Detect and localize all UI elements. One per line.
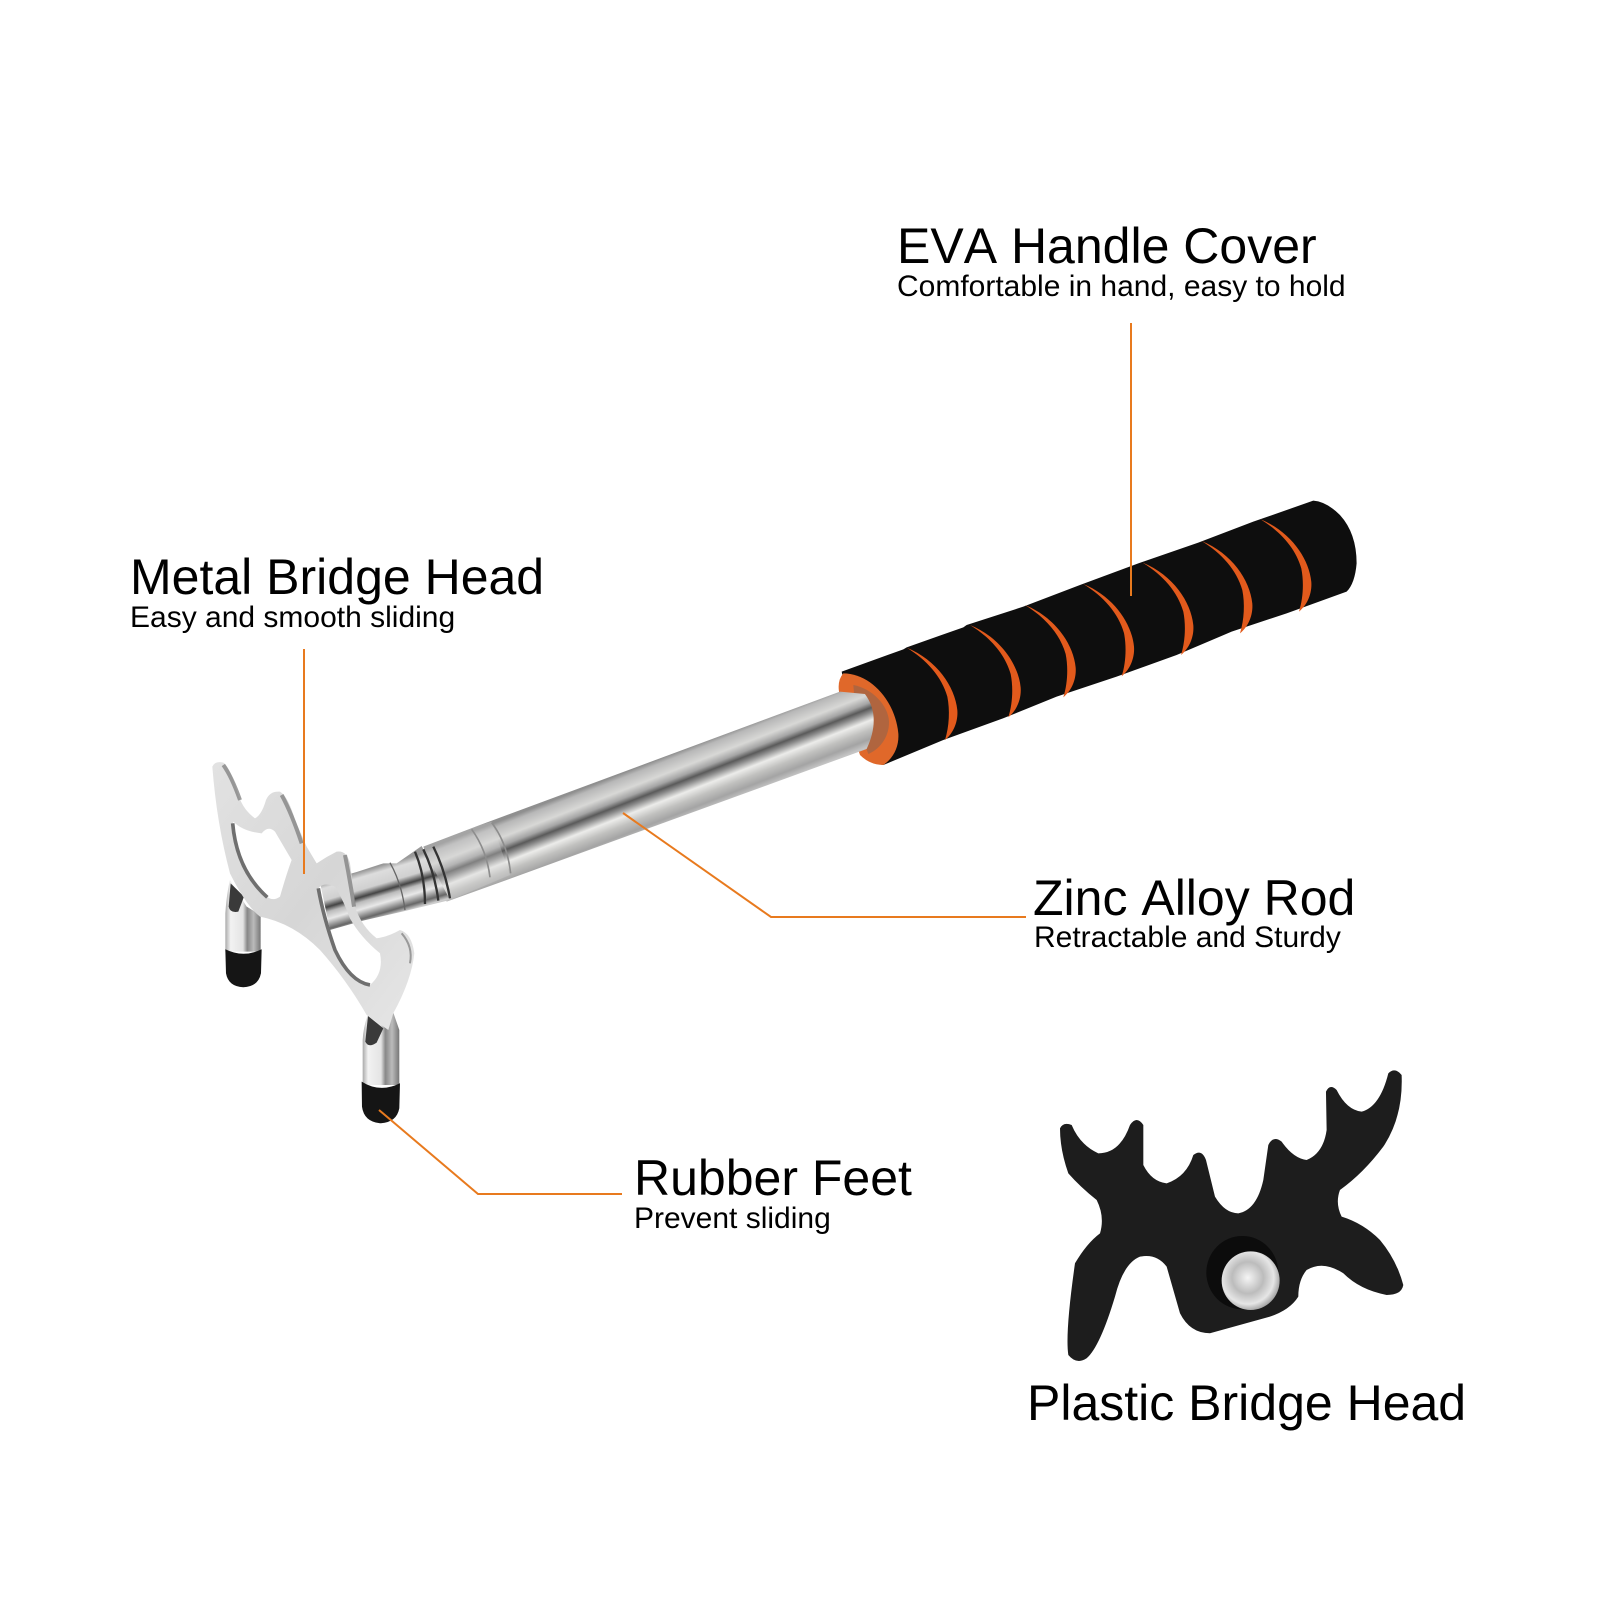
foam handle [839, 501, 1357, 765]
callout: Zinc Alloy Rod [623, 813, 1355, 954]
metal bridge head [212, 762, 414, 1030]
leader line [303, 649, 305, 874]
heading: Metal Bridge Head [130, 549, 544, 605]
description: Easy and smooth sliding [130, 601, 455, 634]
callout: EVA Handle Cover [897, 218, 1346, 596]
metal stud [1222, 1251, 1280, 1310]
description: Prevent sliding [634, 1202, 831, 1235]
plastic bridge head [1060, 1070, 1403, 1361]
product: bridge rod assembly [212, 501, 1357, 1123]
heading: EVA Handle Cover [897, 218, 1317, 274]
stud collar [1206, 1236, 1278, 1309]
heading: Rubber Feet [634, 1150, 912, 1206]
heading: Zinc Alloy Rod [1033, 870, 1355, 926]
threaded neck [320, 846, 450, 930]
leader line [623, 813, 1026, 917]
description: Comfortable in hand, easy to hold [897, 270, 1346, 303]
description: Retractable and Sturdy [1034, 921, 1341, 954]
rubber foot: right [362, 1013, 400, 1123]
telescopic metal rod [423, 692, 874, 902]
callout: Rubber Feet [379, 1110, 912, 1235]
leader line [1130, 323, 1132, 596]
label: Plastic Bridge Head: Plastic Bridge Head [1027, 1375, 1466, 1431]
leader line [379, 1110, 622, 1194]
rubber foot: left [225, 880, 262, 987]
callout: Metal Bridge Head [130, 549, 544, 874]
